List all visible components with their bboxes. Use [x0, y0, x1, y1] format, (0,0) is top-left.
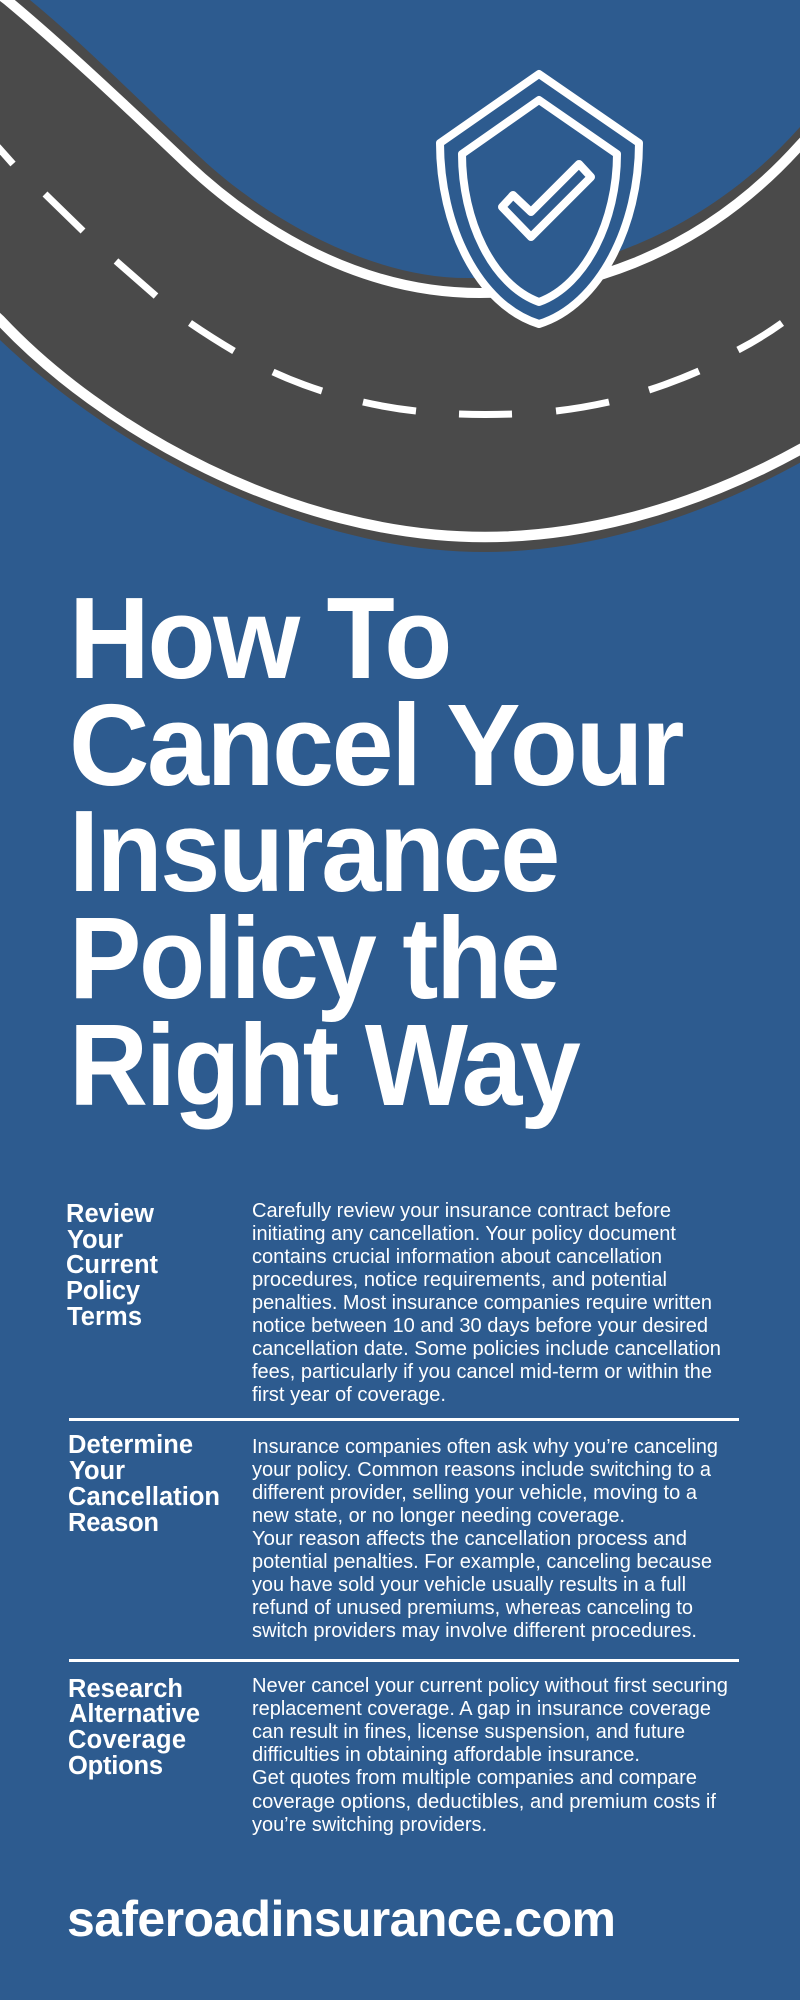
section 1 body text: notice between 10 and 30 days before your desired: [252, 1314, 708, 1337]
footer website: saferoadinsurance.com: [67, 1891, 616, 1947]
road surface: [0, 0, 800, 552]
section 2 heading: Cancellation: [68, 1483, 220, 1511]
section 2 body text: Your reason affects the cancellation process and: [252, 1527, 687, 1550]
section 3 heading: Alternative: [69, 1700, 200, 1728]
section 2 body text: Insurance companies often ask why you’re canceling: [252, 1435, 718, 1458]
section 1 heading: Review: [66, 1200, 154, 1228]
section 1 heading: [66, 1200, 158, 1331]
section 3 body text: difficulties in obtaining affordable insurance.: [252, 1743, 640, 1766]
title: Insurance: [69, 786, 558, 916]
section 2 body text: [252, 1435, 718, 1642]
section 1 body text: penalties. Most insurance companies require written: [252, 1291, 712, 1314]
section 3 body text: Get quotes from multiple companies and compare: [252, 1766, 697, 1789]
section 2 heading: Reason: [68, 1509, 159, 1537]
shield outer outline: [440, 74, 639, 324]
section 3 body text: replacement coverage. A gap in insurance coverage: [252, 1697, 711, 1720]
section 1 body text: [252, 1199, 721, 1406]
section 3 heading: [68, 1675, 200, 1780]
title: How To: [69, 573, 450, 703]
section 2 heading: Your: [69, 1457, 125, 1485]
section 1 body text: contains crucial information about cancellation: [252, 1245, 662, 1268]
section 3 body text: can result in fines, license suspension, and future: [252, 1720, 685, 1743]
section 3 heading: Options: [68, 1752, 163, 1780]
section 1 body text: Carefully review your insurance contract before: [252, 1199, 671, 1222]
title: [69, 573, 683, 1130]
section 2 body text: your policy. Common reasons include switching to a: [252, 1458, 712, 1481]
section 3 body text: you’re switching providers.: [252, 1813, 487, 1836]
section 3 heading: Research: [68, 1675, 183, 1703]
section 2: determine reason: [68, 1431, 718, 1642]
section 3 body text: [252, 1674, 728, 1836]
section 1 heading: Your: [67, 1226, 123, 1254]
title: Policy the: [69, 893, 558, 1023]
road illustration: [0, 0, 800, 552]
lower road edge line: [0, 302, 800, 537]
section 1: review policy terms: [66, 1199, 721, 1406]
section 1 body text: fees, particularly if you cancel mid-term or within the: [252, 1360, 712, 1383]
section 1 heading: Policy: [66, 1277, 141, 1305]
section 1 body text: first year of coverage.: [252, 1383, 446, 1406]
section 2 heading: Determine: [68, 1431, 193, 1459]
title: Right Way: [69, 1000, 580, 1130]
section 1 body text: initiating any cancellation. Your policy document: [252, 1222, 676, 1245]
section 2 heading: [68, 1431, 220, 1537]
section 2 body text: refund of unused premiums, whereas canceling to: [252, 1596, 693, 1619]
section 2 body text: switch providers may involve different procedures.: [252, 1619, 697, 1642]
shield inner outline: [462, 100, 617, 302]
section 3 body text: Never cancel your current policy without first securing: [252, 1674, 728, 1697]
check mark: [502, 164, 591, 237]
title: Cancel Your: [69, 680, 683, 810]
section 2 body text: potential penalties. For example, canceling because: [252, 1550, 712, 1573]
section 2 body text: different provider, selling your vehicle, moving to a: [252, 1481, 698, 1504]
road centre dashes: [0, 146, 782, 414]
section 1 heading: Terms: [67, 1303, 142, 1331]
section 3 body text: coverage options, deductibles, and premium costs if: [252, 1790, 716, 1813]
section 1 heading: Current: [66, 1251, 158, 1279]
section 1 body text: procedures, notice requirements, and potential: [252, 1268, 667, 1291]
section 1 body text: cancellation date. Some policies include cancellation: [252, 1337, 721, 1360]
section 3: research alternatives: [68, 1674, 728, 1836]
section 2 body text: new state, or no longer needing coverage.: [252, 1504, 625, 1527]
section 3 heading: Coverage: [68, 1726, 186, 1754]
icon: shield with check mark: [440, 74, 639, 324]
upper road edge line: [0, 0, 800, 293]
section 2 body text: you have sold your vehicle usually results in a full: [252, 1573, 686, 1596]
